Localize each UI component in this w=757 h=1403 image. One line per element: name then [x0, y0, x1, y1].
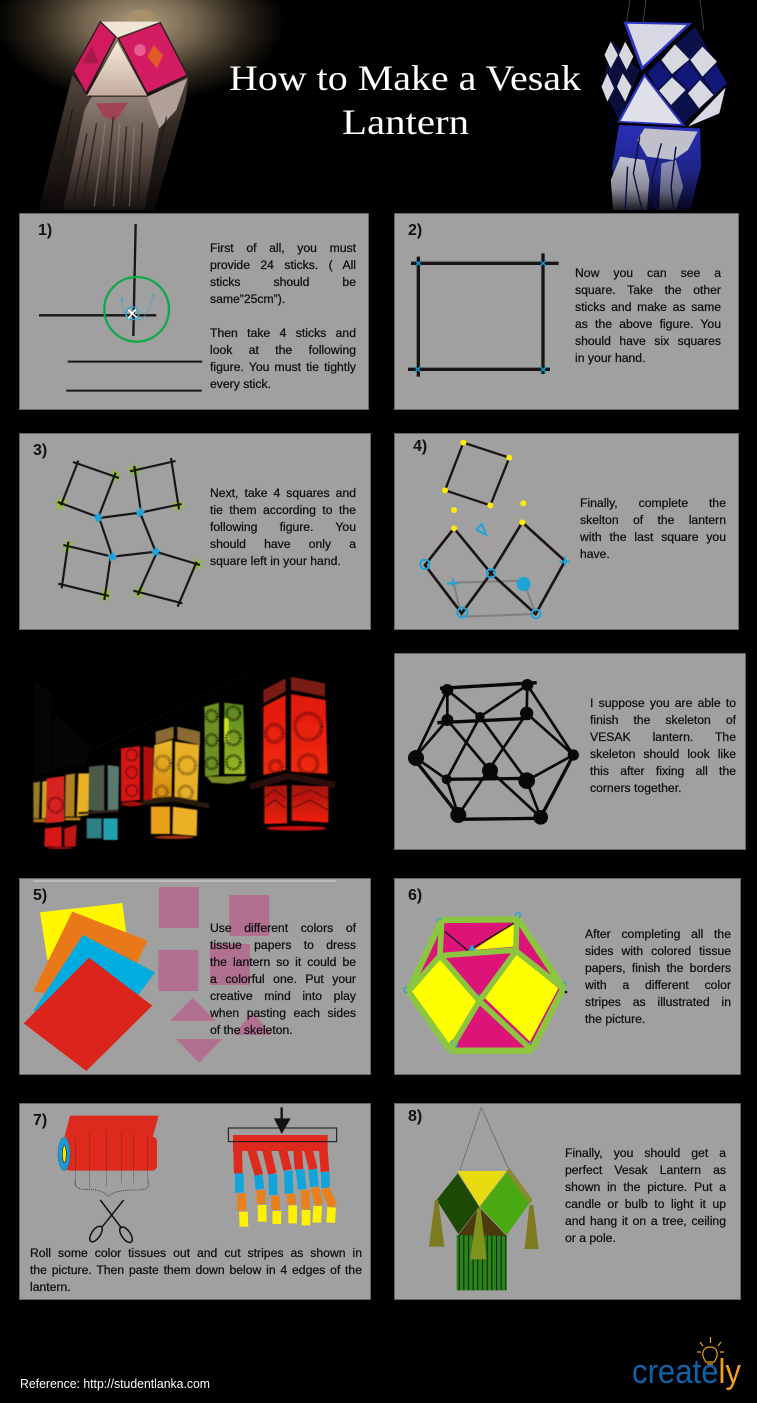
figure: tissue roll, scissors and cut stripes [58, 1107, 338, 1244]
icon: scissors [87, 1200, 135, 1245]
instructions: figure. You must tie tightly [210, 360, 356, 374]
panel: step 2 [394, 213, 739, 410]
instructions: tie them according to the [210, 503, 356, 517]
step number: 3) [33, 442, 47, 459]
instructions [210, 486, 356, 568]
instructions [30, 1246, 362, 1294]
icon: tissue roll [58, 1116, 159, 1197]
instructions [585, 927, 731, 1026]
instructions [210, 241, 356, 391]
instructions: sticks and make as same [575, 300, 721, 314]
instructions: Roll some color tissues out and cut stripes as shown in [30, 1246, 362, 1260]
instructions: and hang it on a tree, ceiling [565, 1214, 726, 1228]
instructions: the lantern so it could be [210, 955, 356, 969]
instructions: this after fixing all the [590, 764, 736, 778]
lantern: small red [44, 776, 77, 849]
instructions: Finally, complete the [580, 496, 726, 510]
instructions: same”25cm”). [210, 292, 285, 306]
instructions [580, 496, 726, 561]
lantern: small yellow [65, 773, 90, 820]
instructions: with a different color [585, 978, 731, 992]
lantern: green [204, 703, 247, 784]
instructions: should have six squares [575, 334, 721, 348]
instructions: skelton of the lantern [580, 513, 726, 527]
step number: 1) [38, 222, 52, 239]
figure: four linked squares [54, 458, 204, 608]
instructions: sticks should be [210, 275, 356, 289]
figure: tied sticks [39, 224, 202, 392]
instructions: Now you can see a [575, 266, 721, 280]
photo: red lantern left [0, 0, 319, 210]
instructions: VESAK lantern. The [590, 730, 736, 744]
reference credit: Reference: http://studentlanka.com [20, 1376, 210, 1391]
instructions: corners together. [590, 781, 681, 795]
instructions: look at the following [210, 343, 356, 357]
instructions: square left in your hand. [210, 554, 341, 568]
instructions: tissue papers to dress [210, 938, 356, 952]
instructions: the picture. Then paste them down below in 4 edges of the [30, 1263, 362, 1277]
lantern: mid red [121, 746, 153, 806]
figure: tissue papers and cut shapes [24, 880, 336, 1071]
panel: step 6 [394, 878, 741, 1075]
step number: 2) [408, 222, 422, 239]
instructions: in your hand. [575, 351, 645, 365]
instructions: Then take 4 sticks and [210, 326, 356, 340]
step number: 8) [408, 1108, 422, 1125]
instructions [590, 696, 736, 795]
panel: step 7 [19, 1103, 371, 1300]
lantern: large red [250, 677, 335, 831]
figure: finished green lantern [429, 1106, 539, 1290]
icon: light bulb [697, 1337, 724, 1364]
panel: step 4 [394, 433, 739, 630]
title text: Lantern [342, 102, 469, 142]
creately logo [632, 1337, 741, 1391]
panel: step 1 [19, 213, 369, 410]
instructions: as the above figure. You [575, 317, 721, 331]
instructions: have. [580, 547, 610, 561]
step number: 7) [33, 1112, 47, 1129]
instructions: of the skeleton. [210, 1023, 293, 1037]
instructions: when pasting each sides [210, 1006, 356, 1020]
instructions: sides with colored tissue [585, 944, 731, 958]
instructions: with the last square you [580, 530, 726, 544]
instructions: or a pole. [565, 1231, 616, 1245]
instructions: the picture. [585, 1012, 645, 1026]
panel: step 5 [19, 878, 371, 1075]
step number: 4) [413, 438, 427, 455]
instructions: Use different colors of [210, 921, 356, 935]
instructions: a colorful one. Put your [210, 972, 356, 986]
figure: skeleton with last square [419, 440, 570, 620]
step number: 5) [33, 887, 47, 904]
instructions: skeleton should look like [590, 747, 736, 761]
panel: step 8 [394, 1103, 741, 1300]
title text: How to Make a Vesak [229, 58, 581, 98]
lantern: teal [78, 765, 119, 840]
instructions: every stick. [210, 377, 271, 391]
instructions: Next, take 4 squares and [210, 486, 356, 500]
instructions: creative mind into play [210, 989, 356, 1003]
instructions: should have only a [210, 537, 356, 551]
instructions [575, 266, 721, 365]
instructions: following figure. You [210, 520, 356, 534]
figure: full lantern skeleton [408, 679, 579, 825]
figure: papered skeleton with green borders [403, 912, 568, 1054]
instructions: Finally, you should get a [565, 1146, 726, 1160]
instructions: perfect Vesak Lantern as [565, 1163, 726, 1177]
lantern: far left yellow [33, 781, 47, 822]
instructions: candle or bulb to light it up [565, 1197, 726, 1211]
instructions: provide 24 sticks. ( All [210, 258, 356, 272]
figure: square of sticks [408, 253, 559, 377]
wordmark: creately [632, 1353, 741, 1391]
photo: glowing lanterns [32, 673, 336, 850]
panel: step 3 [19, 433, 371, 630]
instructions: First of all, you must [210, 241, 356, 255]
instructions: finish the skeleton of [590, 713, 736, 727]
step number: 6) [408, 887, 422, 904]
instructions [565, 1146, 726, 1245]
instructions: lantern. [30, 1280, 71, 1294]
instructions: shown in the picture. Put a [565, 1180, 726, 1194]
instructions: square. Take the other [575, 283, 721, 297]
figure: stripes pasted to a strip [228, 1128, 337, 1227]
photo: blue lantern right [602, 0, 728, 210]
instructions: I suppose you are able to [590, 696, 736, 710]
lantern: yellow [142, 727, 209, 839]
instructions [210, 921, 356, 1037]
instructions: papers, finish the borders [585, 961, 731, 975]
arrow: paste direction [274, 1107, 291, 1134]
header banner with lantern photos [3, 0, 728, 210]
instructions: After completing all the [585, 927, 731, 941]
panel: completed skeleton [394, 653, 746, 850]
instructions: stripes as illustrated in [585, 995, 731, 1009]
title text [229, 58, 581, 142]
